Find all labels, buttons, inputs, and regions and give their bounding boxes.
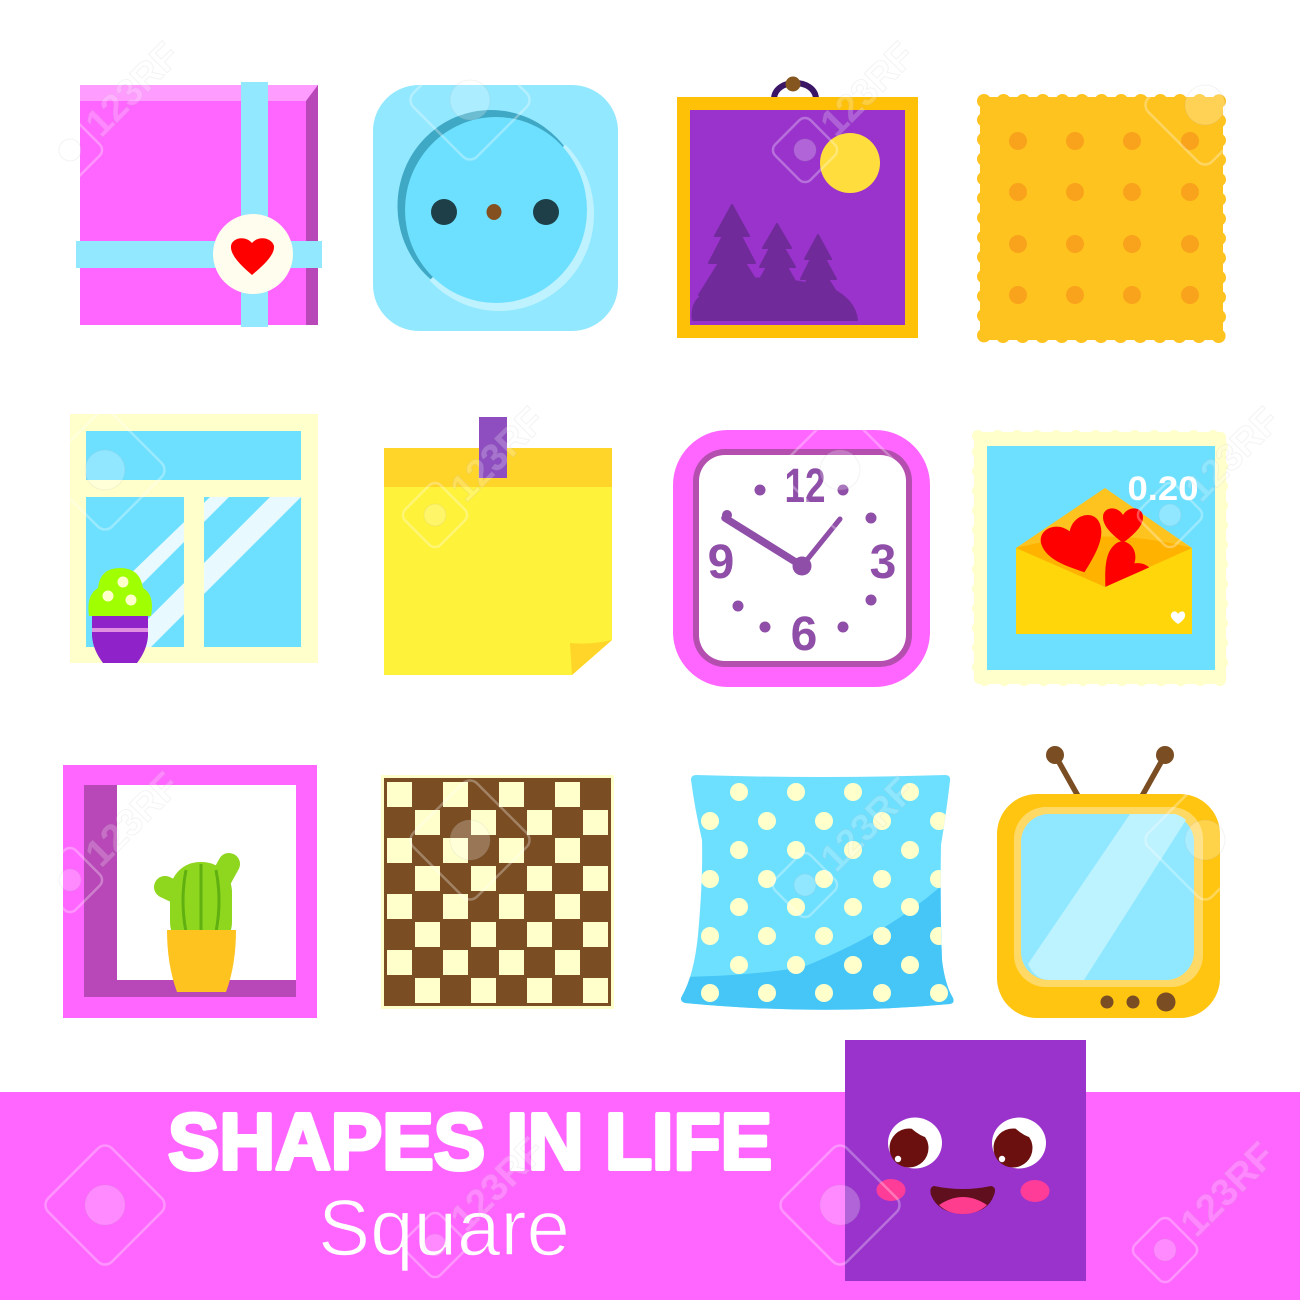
stamp value: 0.20 — [1128, 470, 1198, 508]
bottom band — [0, 1092, 1300, 1300]
title: shapes in life: SHAPES IN LIFE — [168, 1097, 772, 1186]
watermarks: 123RF — [443, 1130, 553, 1240]
icon: chess board — [381, 775, 614, 1009]
icon: wall socket — [373, 85, 618, 331]
subtitle: square: Square — [318, 1183, 570, 1272]
icon: sticky note — [384, 417, 612, 675]
watermarks: 123RF — [443, 400, 553, 510]
icon: window with plant — [70, 414, 318, 663]
envelope — [1016, 548, 1192, 634]
icon: wall niche with cactus — [63, 765, 317, 1018]
watermarks: 123RF — [78, 35, 188, 145]
icon: television — [997, 746, 1220, 1018]
watermarks: 123RF — [1178, 400, 1288, 510]
clock numerals: 9 — [708, 536, 734, 589]
watermarks: 123RF — [813, 35, 923, 145]
icon: polka dot pillow — [681, 775, 954, 1010]
watermarks: 123RF — [78, 765, 188, 875]
icon: cracker — [980, 97, 1223, 340]
clock numerals — [708, 460, 896, 661]
icon: postage stamp — [974, 432, 1226, 684]
watermarks: 123RF — [1173, 1135, 1283, 1245]
icon: gift box — [76, 82, 322, 327]
watermarks: 123RF — [813, 770, 923, 880]
clock numerals: 12 — [784, 460, 826, 513]
icon: framed picture — [677, 76, 918, 338]
icon: wall clock — [673, 430, 930, 687]
clock numerals: 3 — [870, 536, 896, 589]
clock numerals: 6 — [791, 608, 817, 661]
character: smiling purple square — [845, 1040, 1086, 1281]
